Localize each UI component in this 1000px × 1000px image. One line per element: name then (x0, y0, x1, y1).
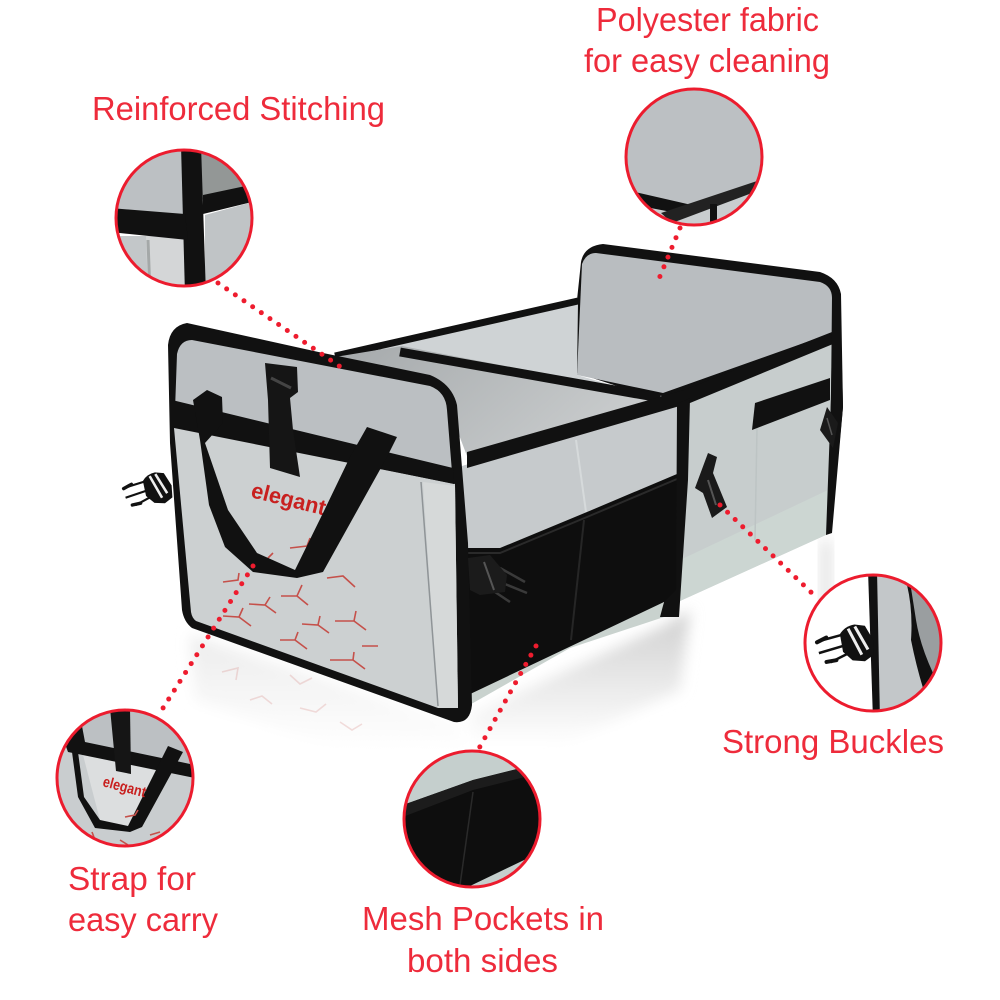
zoom circle: elegant (101, 773, 148, 801)
right pocket band (752, 378, 830, 430)
zoom circle (804, 574, 942, 712)
dotted leader lines (158, 228, 816, 752)
buckle: mesh side (468, 555, 527, 602)
zoom circle (624, 88, 764, 226)
label: both sides (407, 942, 558, 979)
label: Strap for (68, 860, 196, 897)
center strap with buckle (265, 363, 300, 477)
back panel (577, 244, 843, 533)
zoom circle (114, 148, 254, 288)
interior left wall (335, 303, 650, 396)
label (68, 860, 218, 938)
embroidered pattern (223, 528, 378, 669)
rim band (467, 332, 833, 468)
zoom circle (402, 750, 542, 888)
callout: polyester fabric (584, 1, 830, 235)
callout: reinforced stitching (92, 90, 385, 295)
label: easy carry (68, 901, 218, 938)
zoom circle (56, 708, 194, 848)
buckle: far left (122, 470, 175, 511)
label: Mesh Pockets in (362, 900, 604, 937)
storage organizer bag (122, 244, 843, 722)
mesh pocket (462, 474, 680, 696)
heading: Polyester fabric (596, 1, 819, 38)
brand logo: elegant (249, 478, 329, 520)
corner binding (660, 398, 690, 617)
floor reflection (190, 540, 832, 750)
strip below mesh (466, 598, 664, 707)
label: Strong Buckles (722, 723, 944, 760)
callout: strap (50, 705, 218, 938)
callout: mesh pockets (362, 745, 604, 979)
left compartment interior (335, 346, 662, 456)
heading: Reinforced Stitching (92, 90, 385, 127)
buckle: center (695, 453, 727, 518)
callout: strong buckles (722, 570, 950, 760)
long side panel (462, 400, 682, 570)
carry handle (193, 390, 397, 578)
divider bar (400, 352, 660, 398)
right end panel (680, 344, 832, 601)
heading: for easy cleaning (584, 42, 830, 79)
right edge binding (826, 292, 843, 535)
front panel (168, 323, 472, 722)
fold seam (576, 440, 586, 512)
label (362, 900, 604, 979)
heading (584, 1, 830, 79)
back rim of bag (335, 301, 578, 356)
buckle: right (820, 407, 838, 448)
